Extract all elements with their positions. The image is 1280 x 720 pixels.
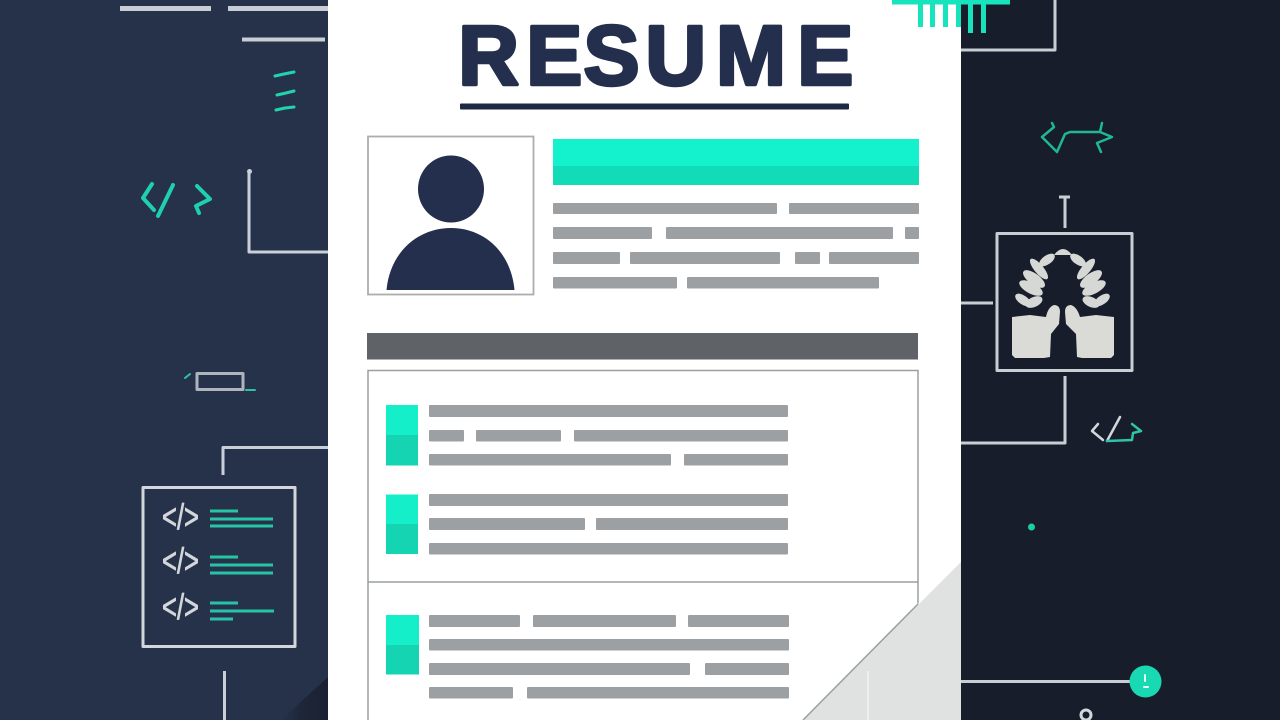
connector: upper left elbow	[247, 169, 328, 252]
section header bar	[367, 333, 918, 360]
connector: lower left stub	[223, 671, 226, 720]
icon: teal code tag	[143, 184, 210, 216]
connector: award box to paper	[961, 376, 1065, 443]
entry 1 marker	[386, 405, 418, 466]
section frame	[368, 370, 918, 720]
code row 1	[162, 496, 273, 537]
title underline	[460, 104, 849, 110]
left wreath leaves	[1013, 251, 1057, 310]
icon: teal chip at top edge	[892, 0, 1010, 33]
icon: laurel wreath	[1013, 249, 1112, 310]
right wreath leaves	[1068, 251, 1112, 310]
entry 3 lines	[429, 615, 789, 698]
entry 2 lines	[429, 494, 788, 554]
entry 3	[386, 615, 789, 698]
code row 2: </>	[162, 540, 199, 581]
summary text lines	[553, 203, 919, 288]
code row 3	[162, 586, 274, 627]
icon: teal alert node	[1130, 666, 1162, 698]
paper shadow corner	[281, 677, 328, 720]
entry 1	[386, 405, 788, 466]
right panel circuitry	[961, 0, 1162, 720]
icon: teal double arrow code mark	[1042, 123, 1112, 152]
left background panel	[0, 0, 329, 720]
icon: small teal dashes	[275, 72, 294, 110]
connector: line to teal node	[961, 680, 1132, 683]
icon: small ring node	[1081, 710, 1091, 720]
panel: resume paper	[328, 0, 961, 720]
icon: mixed code mark	[1092, 417, 1141, 441]
title: RESUME	[458, 8, 853, 102]
entry 2	[386, 494, 788, 554]
code row 1: </>	[162, 496, 199, 537]
icon: right thumbs-up hand	[1065, 305, 1114, 358]
icon: left thumbs-up hand	[1012, 305, 1060, 358]
icon: small teal dot	[1028, 524, 1035, 530]
entry 1 lines	[429, 405, 788, 466]
left panel circuitry	[120, 8, 328, 720]
connector: top right elbow	[961, 0, 1055, 50]
icon: person body	[386, 228, 514, 290]
entry 2 marker	[386, 494, 418, 554]
folded page corner	[803, 562, 961, 720]
panel: award box	[997, 234, 1132, 370]
code row 3: </>	[162, 586, 199, 627]
connector: paper to award box	[961, 302, 993, 304]
top left horizontal lines	[120, 8, 328, 40]
entry 3 marker	[386, 615, 419, 674]
right background panel	[960, 0, 1280, 720]
name banner	[553, 139, 919, 185]
connector: code box elbow	[223, 448, 328, 475]
photo frame	[368, 136, 534, 294]
code row 2	[162, 540, 273, 581]
connector: arrow to award box	[1059, 197, 1070, 228]
icon: person head	[418, 156, 484, 222]
icon: small outlined rectangle	[185, 374, 255, 390]
panel: code list box	[143, 488, 295, 646]
